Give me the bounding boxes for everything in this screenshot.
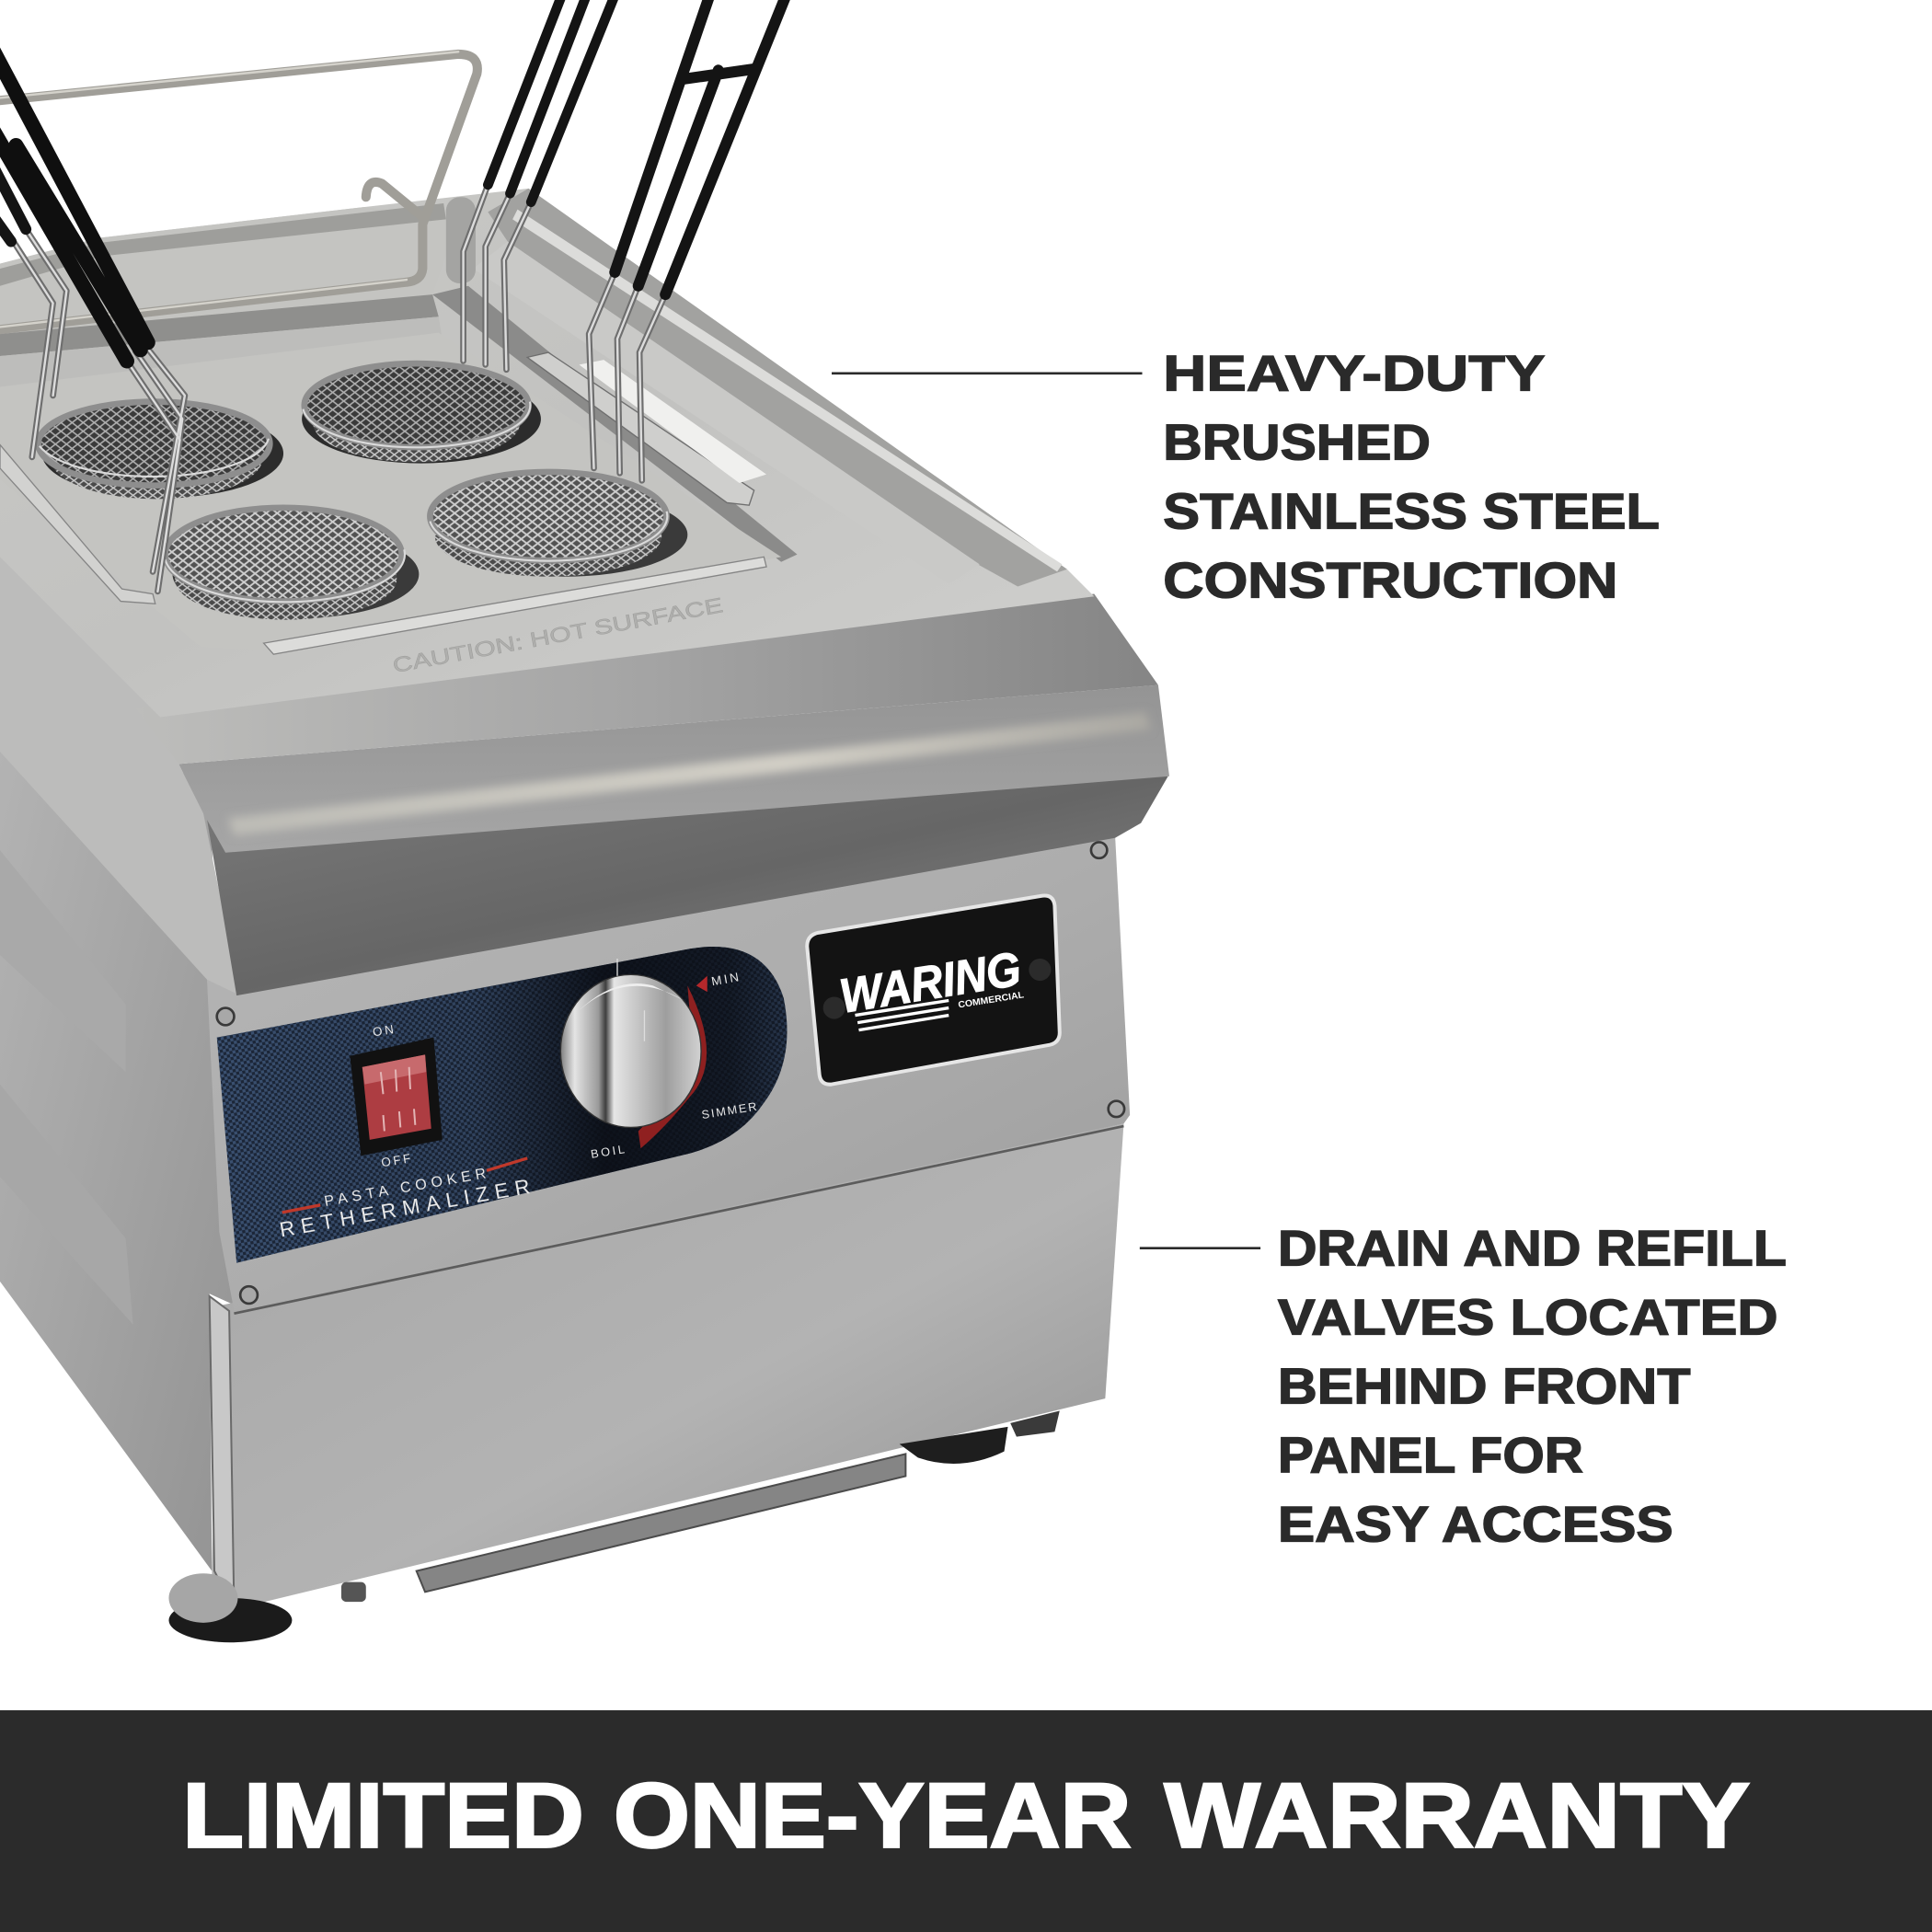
tray back rim: [0, 203, 446, 286]
lower front drawer panel: [210, 1123, 1123, 1609]
callout text: [1163, 345, 1660, 609]
underside of hood: [207, 776, 1168, 995]
product name: RETHERMALIZER: [278, 1174, 532, 1242]
boil label: BOIL: [590, 1142, 628, 1161]
left foot: [168, 1573, 292, 1642]
callout text: VALVES LOCATED: [1278, 1288, 1778, 1345]
logo wordmark: WARING: [836, 942, 1025, 1024]
callout text: HEAVY-DUTY: [1163, 345, 1545, 402]
pasta cooker product illustration: [0, 0, 1169, 1642]
left hood side: [0, 542, 240, 995]
fascia drawer seam: [234, 1126, 1123, 1314]
callout text: EASY ACCESS: [1278, 1495, 1673, 1552]
off label: OFF: [380, 1151, 414, 1169]
recess dark wall: [432, 286, 798, 562]
warranty banner: [0, 1710, 1932, 1932]
logo stripes: [855, 1001, 949, 1030]
callout text: DRAIN AND REFILL: [1278, 1219, 1787, 1276]
fascia screws: [217, 842, 1124, 1304]
trough band: [0, 294, 439, 356]
right slot rail: [527, 352, 754, 505]
switch labels: ON: [372, 1022, 397, 1039]
callout text: BEHIND FRONT: [1278, 1357, 1691, 1414]
leader line: [1140, 1248, 1260, 1249]
insert front lip: [264, 557, 766, 654]
product name: PASTA COOKER: [323, 1165, 488, 1210]
callout text: CONSTRUCTION: [1163, 552, 1617, 609]
engraved caution text: CAUTION: HOT SURFACE: [391, 592, 725, 677]
callout: stainless steel: [832, 345, 1660, 609]
rear caster stub: [341, 1582, 366, 1602]
handles back right basket: [464, 0, 615, 370]
banner text: ONE-YEAR: [614, 1765, 1131, 1868]
control fascia: [207, 835, 1130, 1311]
insert left lip: [0, 444, 155, 604]
banner text: WARRANTY: [1165, 1765, 1750, 1868]
knob labels: MIN: [710, 970, 742, 988]
callout text: [1278, 1219, 1787, 1552]
simmer label: SIMMER: [701, 1099, 759, 1121]
cabinet side panel: [0, 579, 236, 1571]
rack post: [446, 197, 476, 283]
tray right rim dark band: [488, 189, 1067, 587]
bottom service tray: [417, 1454, 905, 1592]
hood front band: [178, 685, 1169, 853]
basket back left: [39, 402, 283, 499]
handles back left basket: [0, 165, 66, 457]
handles front right basket: [589, 0, 786, 480]
basket front right: [430, 472, 687, 577]
hood highlight stripe: [228, 712, 1151, 835]
tray back shelf: [0, 207, 458, 334]
handles front left basket: [0, 50, 185, 592]
callout text: PANEL FOR: [1278, 1426, 1583, 1483]
insert plate: [0, 333, 781, 650]
callout: drain and refill valves: [1140, 1219, 1787, 1552]
blue control panel: [217, 947, 788, 1263]
hood sloped top: [135, 594, 1158, 764]
banner text: LIMITED: [182, 1765, 584, 1868]
basket front left: [165, 508, 419, 620]
right foot: [900, 1410, 1060, 1464]
power switch: [350, 1022, 443, 1156]
rear wire rack: [0, 52, 477, 330]
top tray surface: [0, 189, 1094, 717]
banner text: [182, 1765, 1750, 1868]
callout text: BRUSHED: [1163, 414, 1431, 471]
basket back right: [302, 363, 541, 464]
banner background: [0, 1710, 1932, 1932]
callout text: STAINLESS STEEL: [1163, 483, 1660, 540]
leader line: [832, 373, 1143, 374]
Waring logo badge: [807, 896, 1060, 1085]
rear shelf lower: [0, 316, 443, 387]
commercial mark: COMMERCIAL: [958, 990, 1025, 1010]
temperature knob: [560, 959, 742, 1148]
